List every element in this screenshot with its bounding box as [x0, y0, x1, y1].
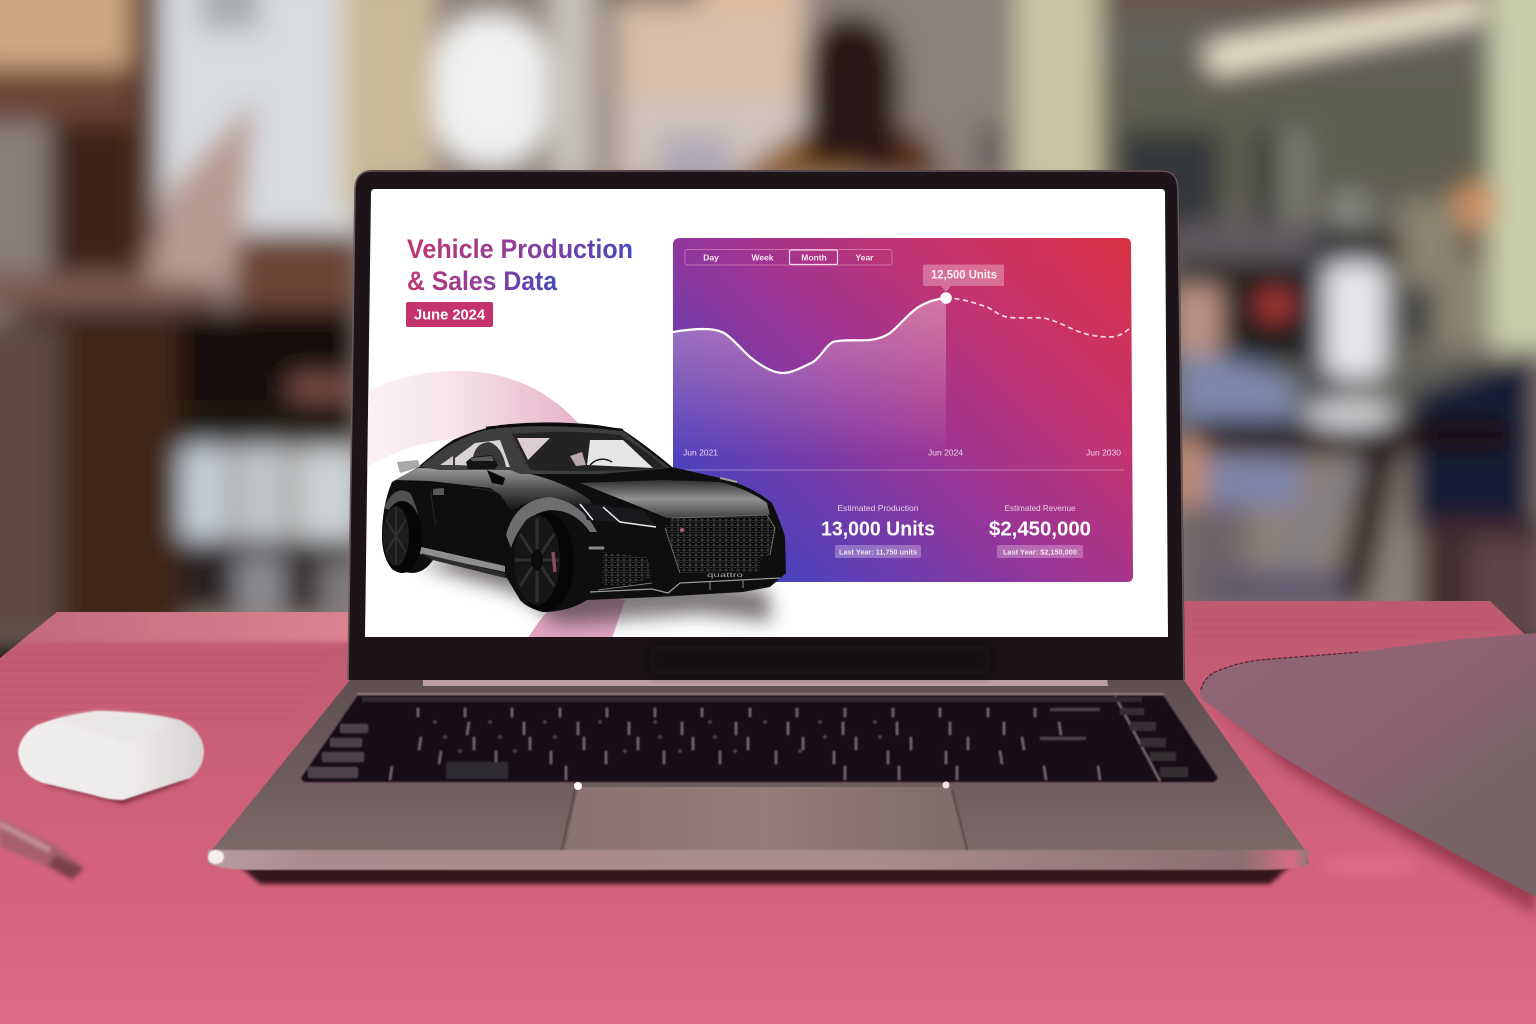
- body shoulder highlight: [395, 468, 592, 510]
- door handle: [433, 488, 444, 495]
- windshield: [512, 432, 666, 471]
- side windows: [440, 456, 453, 465]
- blurred office background: [0, 0, 1536, 650]
- date badge: [406, 302, 493, 327]
- right wall: [1100, 0, 1495, 440]
- title: [407, 238, 632, 290]
- front wheel arch highlight: [506, 497, 597, 548]
- x axis labels: Jun 2024: [928, 448, 963, 458]
- statistic: estimated revenue: Estimated Revenue: [1004, 503, 1076, 513]
- x axis labels: Jun 2021: [683, 448, 718, 458]
- statistic: estimated production: 13,000 Units: [821, 518, 935, 540]
- front wheel: [514, 512, 574, 612]
- time range tabs: Day: [703, 252, 719, 262]
- chart tooltip: 12,500 Units: [931, 268, 997, 282]
- screen: [365, 189, 1168, 638]
- grille: [665, 515, 775, 573]
- statistic: estimated production: Last Year: 11,750 units: [839, 548, 917, 556]
- keyboard deck: [208, 680, 1309, 864]
- panel: chart and statistics: [673, 238, 1133, 582]
- laptop shadow: [240, 866, 1290, 884]
- x axis labels: [683, 450, 1121, 456]
- chart tooltip: [923, 264, 1004, 292]
- statistic: estimated production: [821, 503, 935, 558]
- leather pouch: [1200, 633, 1536, 915]
- decorative pink swoosh: [365, 371, 625, 638]
- time range tabs: Year: [856, 252, 874, 262]
- pink wooden desk: [0, 601, 1536, 1024]
- left shelf: [0, 0, 135, 70]
- rear spoiler: [397, 460, 420, 473]
- time range tabs: Month: [801, 252, 827, 262]
- side mirror: [466, 455, 498, 469]
- laptop lid and bezel: [348, 170, 1185, 680]
- statistic: estimated revenue: [989, 503, 1091, 558]
- statistic: estimated revenue: $2,450,000: [989, 518, 1091, 540]
- car body: [382, 422, 786, 612]
- front splitter: [590, 578, 780, 593]
- roof and pillars: [420, 425, 670, 474]
- rear wheel arch highlight: [384, 490, 419, 518]
- rear wheel: [382, 501, 422, 573]
- front edge: [208, 850, 1309, 870]
- black sports car: [382, 422, 786, 624]
- lower air intake: [602, 552, 652, 585]
- laptop base: [208, 678, 1309, 870]
- title: & Sales Data: [407, 266, 557, 296]
- line chart: [673, 292, 1130, 440]
- hinge bar: [423, 678, 1108, 686]
- statistic: estimated revenue: Last Year: $2,150,000: [1003, 548, 1077, 556]
- side sill: [415, 546, 505, 572]
- trackpad: [561, 782, 968, 853]
- earbud case: [18, 711, 204, 804]
- icon: pen on desk: [0, 818, 84, 880]
- date badge: June 2024: [414, 308, 485, 324]
- keyboard: [301, 694, 1218, 782]
- badge text: quattro: [707, 572, 744, 579]
- time range tabs: Week: [751, 252, 774, 262]
- left window: [160, 0, 360, 232]
- title: Vehicle Production: [407, 234, 633, 264]
- centre wall: [355, 0, 435, 180]
- car shadow: [420, 550, 772, 624]
- headlight: [580, 503, 657, 527]
- statistic: estimated production: Estimated Production: [838, 503, 919, 513]
- x axis labels: Jun 2030: [1086, 448, 1121, 458]
- hood: [580, 480, 770, 518]
- time range tabs: [685, 250, 892, 265]
